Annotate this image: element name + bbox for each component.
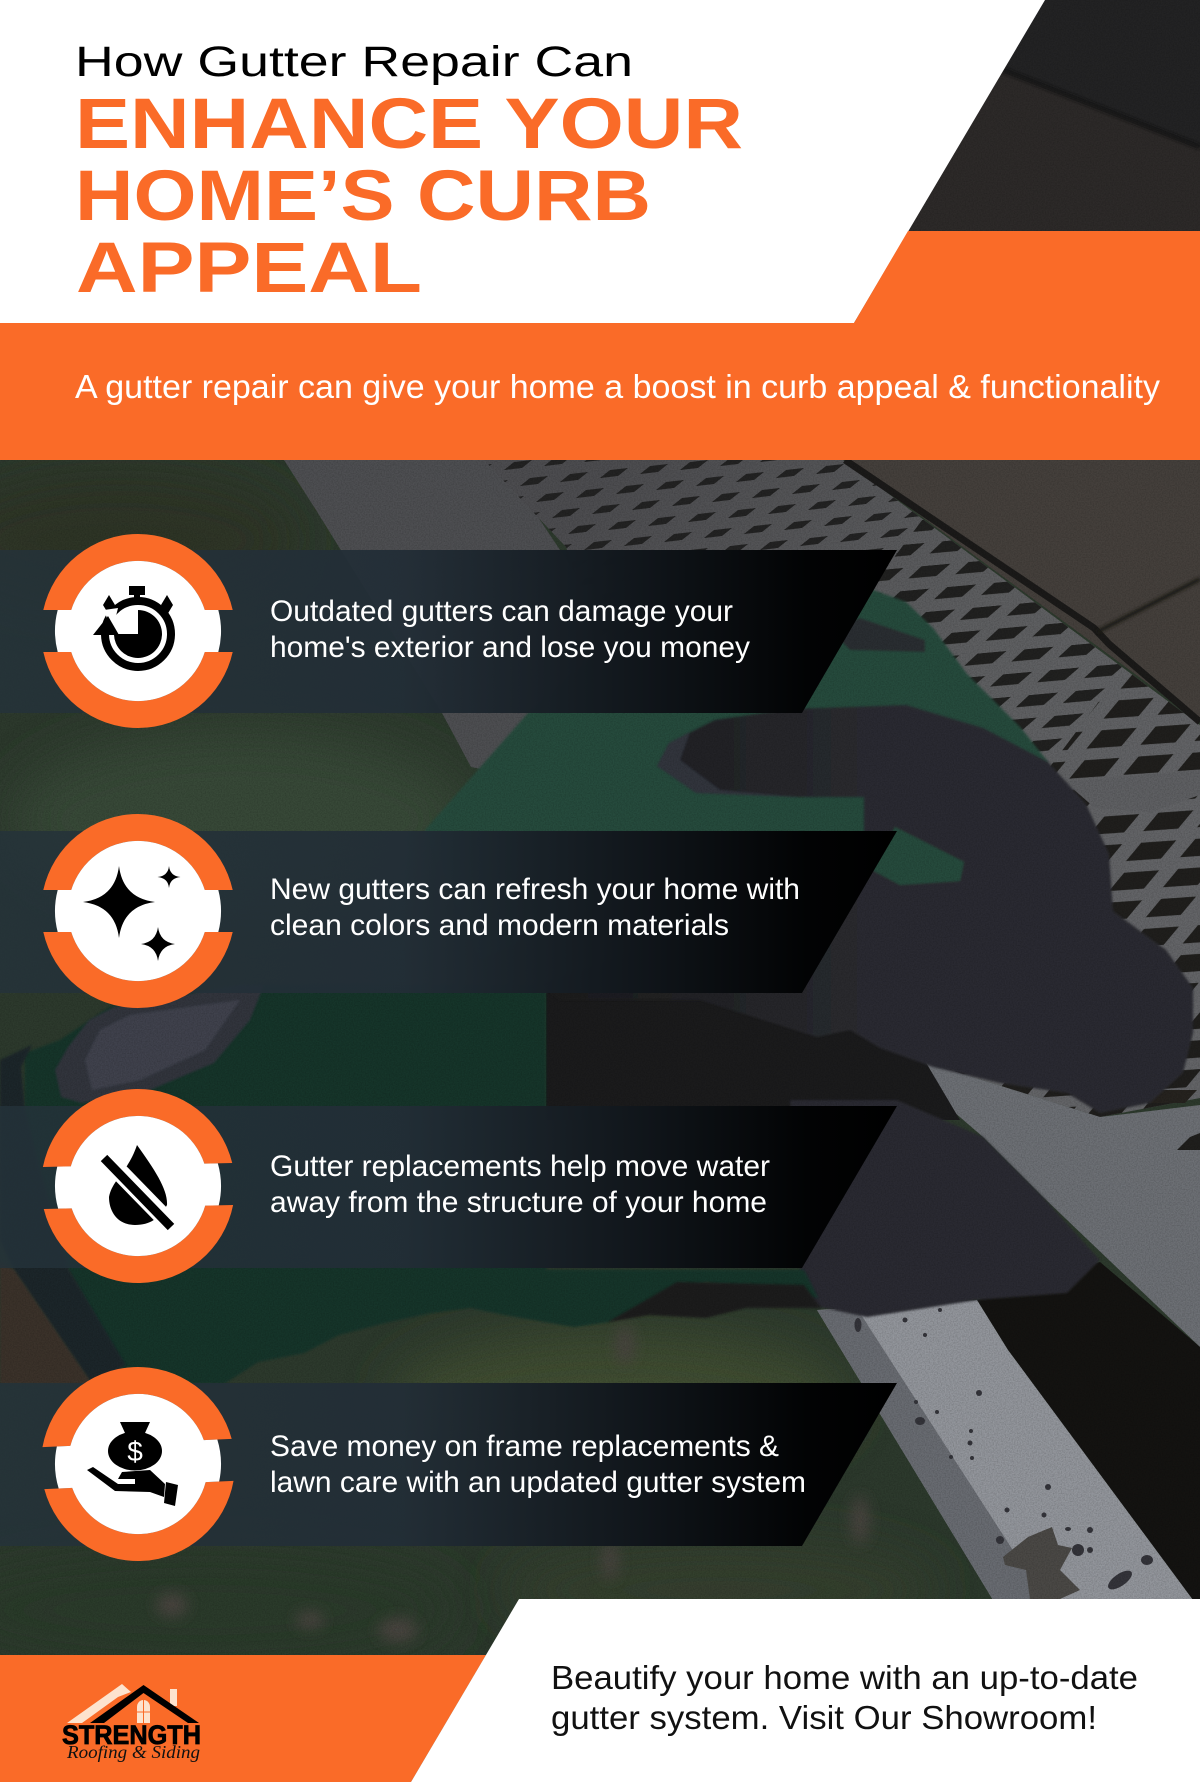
panel: gutter replacements xyxy=(0,1087,897,1285)
icon: stopwatch xyxy=(93,586,173,667)
text: new gutters xyxy=(270,873,800,942)
panel: save money xyxy=(0,1363,897,1565)
fallen leaves in the grass xyxy=(156,1325,869,1642)
call to action text: gutter system. Visit Our Showroom! xyxy=(551,1699,1097,1736)
green knit cuff xyxy=(25,985,818,1384)
logo: Strength Roofing & Siding: Roofing & Siding xyxy=(66,1742,200,1762)
title main text xyxy=(75,85,743,308)
subtitle: A gutter repair can give your home a boost in curb appeal & functionality xyxy=(75,368,1161,405)
title lead-in line: How Gutter Repair Can xyxy=(75,38,633,86)
footer orange panel xyxy=(0,1655,486,1782)
gutter guard plain front band xyxy=(284,460,740,820)
panel: new gutters xyxy=(0,814,897,1008)
grey glove strap xyxy=(55,985,264,1103)
text: outdated gutters xyxy=(270,595,750,664)
black glove fingers xyxy=(540,705,1193,1317)
header white panel xyxy=(0,0,1045,323)
icon: money bag over hand: $ xyxy=(127,1436,143,1467)
navy cuff edge xyxy=(0,1045,126,1384)
dark glove band at cuff edge xyxy=(608,1282,821,1322)
text: gutter replacements xyxy=(270,1150,770,1219)
text: save money: lawn care with an updated gutter system xyxy=(270,1466,806,1499)
skin on the wrist xyxy=(0,1262,92,1384)
text: new gutters: clean colors and modern materials xyxy=(270,909,729,942)
roof shingles, top right corner xyxy=(880,0,1200,240)
title main text: APPEAL xyxy=(76,229,422,308)
title main text: HOME’S CURB xyxy=(75,157,651,236)
shingles below the roof line xyxy=(845,460,1200,722)
badge: stopwatch xyxy=(43,534,233,728)
dark gap under glove xyxy=(546,985,960,1120)
text: save money: Save money on frame replacements & xyxy=(270,1430,779,1463)
call to action text: Beautify your home with an up-to-date xyxy=(551,1659,1138,1696)
title xyxy=(75,38,743,308)
badge: sparkles xyxy=(43,814,233,1008)
badge: water drop xyxy=(41,1087,235,1285)
call to action text xyxy=(551,1659,1138,1736)
lower speckled gutter xyxy=(817,1300,1193,1600)
text: outdated gutters: Outdated gutters can damage your xyxy=(270,595,733,628)
icon: money bag over hand xyxy=(87,1422,178,1506)
gutter guard mesh xyxy=(488,460,1200,1117)
dark gutter channel xyxy=(977,1262,1200,1610)
icon: crossed water drop xyxy=(100,1145,178,1232)
text: save money xyxy=(270,1430,806,1499)
text: outdated gutters: home's exterior and lose you money xyxy=(270,631,750,664)
badge: money hand xyxy=(39,1363,237,1565)
text: gutter replacements: Gutter replacements help move water xyxy=(270,1150,770,1183)
icon: sparkles xyxy=(83,866,180,961)
orange banner xyxy=(0,231,1200,460)
logo: Strength Roofing & Siding xyxy=(62,1684,201,1762)
panel: outdated gutters xyxy=(0,534,897,728)
green knit glove back xyxy=(425,588,1048,960)
text: gutter replacements: away from the structure of your home xyxy=(270,1186,767,1219)
gutter lip and plate xyxy=(880,1048,1200,1347)
text: new gutters: New gutters can refresh your home with xyxy=(270,873,800,906)
title main text: ENHANCE YOUR xyxy=(75,85,743,164)
footer white panel xyxy=(411,1599,1200,1782)
logo: Strength Roofing & Siding: STRENGTH xyxy=(62,1720,201,1750)
